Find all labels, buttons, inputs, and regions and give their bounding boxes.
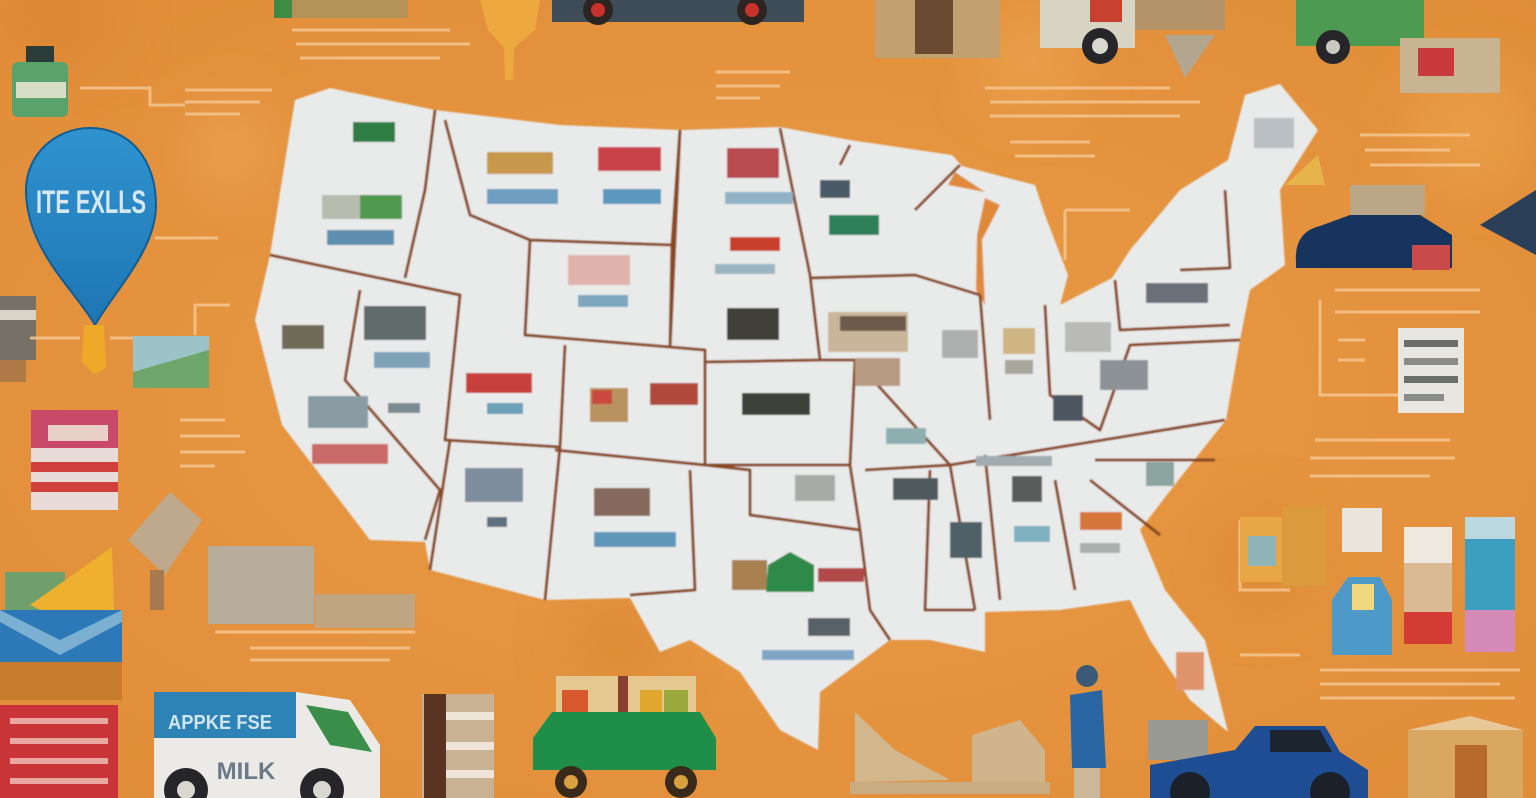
icon: bottle — [12, 46, 68, 117]
icon: paper plane and blue box — [0, 547, 122, 662]
icon: delivery person — [1070, 665, 1106, 798]
top row illustrations — [274, 0, 1500, 93]
icon: landscape card — [133, 336, 209, 388]
icon: crate — [0, 662, 122, 700]
icon: stacked sign — [0, 296, 36, 382]
icon: green cargo truck — [533, 676, 716, 798]
right side illustrations — [1240, 155, 1536, 655]
icon: grey boxes — [208, 546, 415, 628]
land outline — [255, 84, 1318, 750]
icon: blue car — [1148, 720, 1368, 798]
icon: blue location pin with label: ITE EXLLS — [36, 184, 146, 220]
icon: cardboard steps — [850, 712, 1050, 794]
state borders — [270, 110, 1240, 640]
icon: navy car — [1285, 155, 1536, 270]
icon: red calendar — [0, 705, 118, 798]
map of the United States — [255, 84, 1318, 750]
top illustration: white truck — [1040, 0, 1225, 78]
bottom row illustrations — [154, 665, 1523, 798]
icon: striped shelf — [422, 694, 494, 798]
icon: white delivery van — [154, 692, 380, 798]
icon: white delivery van: APPKE FSE — [168, 712, 272, 734]
left side illustrations — [0, 46, 415, 798]
icon: blue bag — [1332, 577, 1392, 655]
top illustration: green truck — [1296, 0, 1500, 93]
top illustration: dark truck — [552, 0, 804, 25]
icon: document — [1398, 328, 1464, 413]
icon: flag card — [31, 410, 118, 510]
top illustration: building — [875, 0, 1000, 58]
icon: white delivery van: MILK — [217, 758, 276, 785]
icon: blue location pin with label — [26, 128, 156, 374]
icon: package on stick — [128, 492, 202, 610]
Great Lakes gap — [948, 172, 1000, 305]
icon: parcels and notes — [1240, 506, 1382, 586]
icon: cardboard box — [1408, 716, 1523, 798]
bar chart: coloured columns — [1404, 517, 1515, 652]
state labels — [282, 118, 1294, 690]
top illustration: box — [274, 0, 408, 18]
top illustration: tree — [480, 0, 540, 80]
